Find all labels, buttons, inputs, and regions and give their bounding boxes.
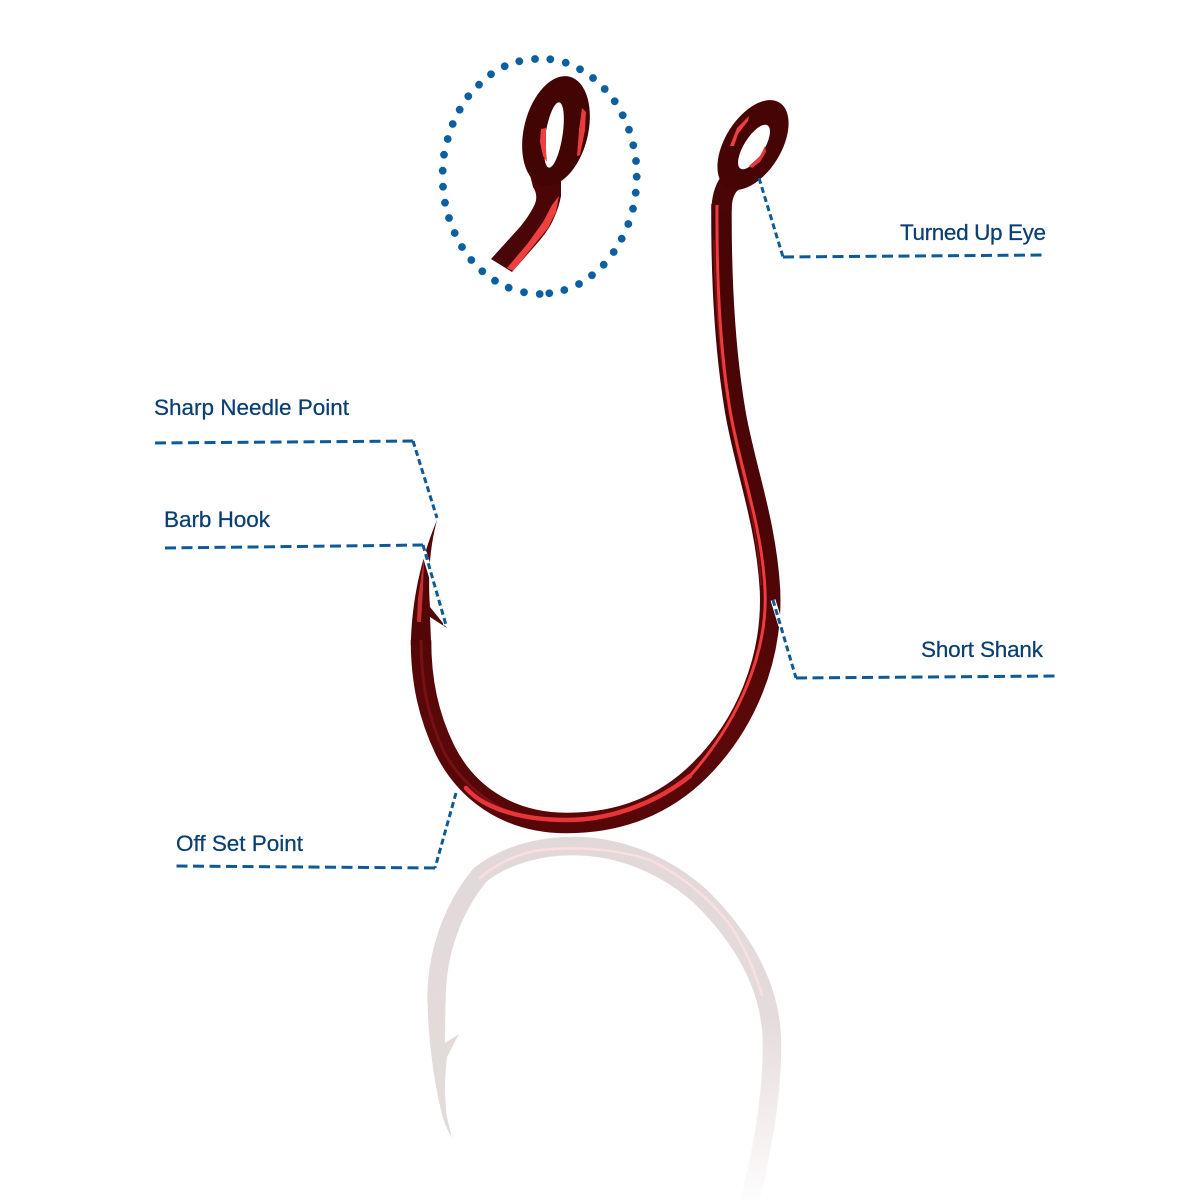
- barb tip highlight: [417, 558, 424, 622]
- detail eye hole: [540, 101, 568, 169]
- leader halo: [773, 600, 781, 626]
- label: Off Set Point: [176, 831, 304, 856]
- hook bottom highlight: [466, 776, 690, 820]
- detail eye ring: [511, 69, 601, 193]
- eye highlight hole: [749, 146, 766, 168]
- leader horizontal: [155, 441, 413, 443]
- detail hole highlight: [540, 128, 547, 162]
- label: Sharp Needle Point: [154, 395, 350, 420]
- eye hole: [732, 120, 776, 174]
- label: Turned Up Eye: [900, 220, 1046, 245]
- leader diagonal: [413, 441, 437, 518]
- leader diagonal: [423, 545, 446, 625]
- leader horizontal: [783, 255, 1043, 257]
- leader horizontal: [176, 866, 435, 868]
- reflection point and barb: [428, 1000, 459, 1138]
- hook body: [421, 204, 770, 823]
- hook point and barb: [411, 520, 447, 645]
- callout: sharp needle point: [154, 395, 437, 518]
- main red hook: [411, 88, 803, 823]
- callout: off set point: [176, 793, 456, 868]
- hook neck: [711, 178, 745, 210]
- label: Barb Hook: [164, 507, 271, 532]
- hook inner sheen: [421, 640, 530, 818]
- callout: barb hook: [164, 507, 446, 625]
- callout: short shank: [773, 600, 1055, 678]
- leader diagonal: [759, 178, 783, 257]
- callout: turned up eye: [759, 178, 1046, 257]
- detail neck highlight: [507, 196, 559, 271]
- leader horizontal: [796, 676, 1055, 678]
- detail view of turned up eye: [439, 55, 641, 298]
- eye ring: [703, 88, 803, 202]
- leader halo: [424, 552, 446, 625]
- leader diagonal: [773, 600, 796, 678]
- reflection curve: [436, 846, 772, 1200]
- detail eye highlight right: [577, 108, 586, 156]
- dotted circle: [439, 55, 641, 298]
- eye highlight left: [730, 116, 749, 146]
- label: Short Shank: [921, 637, 1044, 662]
- detail neck: [491, 175, 561, 272]
- reflection highlight: [480, 848, 762, 995]
- leader diagonal: [435, 793, 456, 868]
- leader horizontal: [165, 545, 423, 548]
- hook bright highlight: [690, 205, 765, 776]
- reflection of hook: [428, 846, 772, 1200]
- shank dark line: [714, 240, 761, 585]
